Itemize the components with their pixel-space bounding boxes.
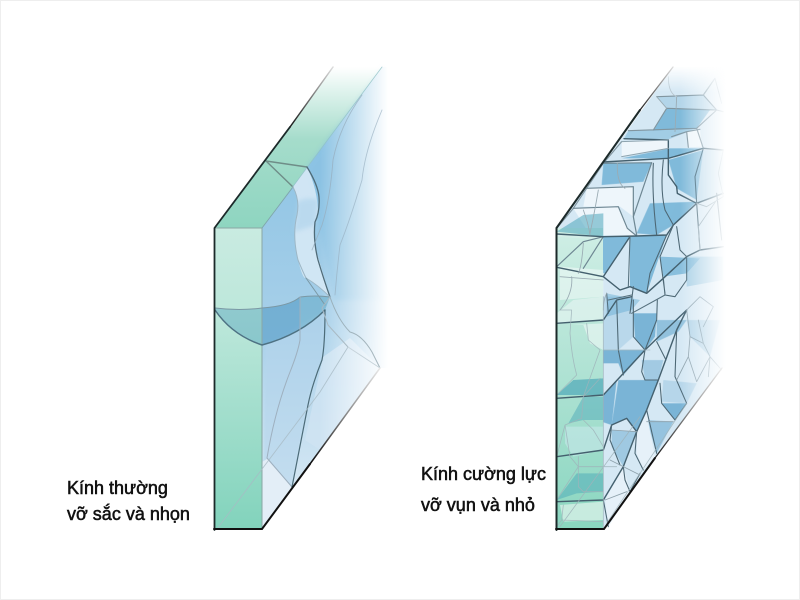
front face facets bbox=[557, 213, 603, 522]
pale fractured chip bbox=[293, 167, 330, 297]
crack lines on tempered glass, upper half bbox=[557, 77, 723, 528]
outer black edges of tempered glass bbox=[556, 67, 722, 530]
lower corner pale facet bbox=[262, 459, 292, 529]
label: tempered glass: Kính cường lực bbox=[421, 464, 546, 484]
label: tempered glass: vỡ vụn và nhỏ bbox=[421, 495, 535, 515]
blue shards bbox=[574, 95, 718, 316]
crack lines on tempered glass, lower half bbox=[557, 297, 722, 528]
top face of ordinary glass bbox=[215, 67, 382, 228]
outer black edges of ordinary glass bbox=[214, 67, 380, 530]
panel: tempered glass bbox=[555, 66, 724, 531]
panel: ordinary glass bbox=[213, 66, 384, 531]
front face of tempered glass bbox=[557, 228, 603, 529]
side face of tempered glass bbox=[558, 71, 722, 528]
crack lines on ordinary glass bbox=[215, 67, 382, 529]
label: ordinary glass: Kính thường bbox=[67, 478, 168, 498]
front face of ordinary glass bbox=[215, 228, 262, 529]
side face of ordinary glass bbox=[262, 67, 384, 486]
curved impact chip bbox=[215, 296, 330, 345]
label: ordinary glass: vỡ sắc và nhọn bbox=[67, 503, 190, 524]
